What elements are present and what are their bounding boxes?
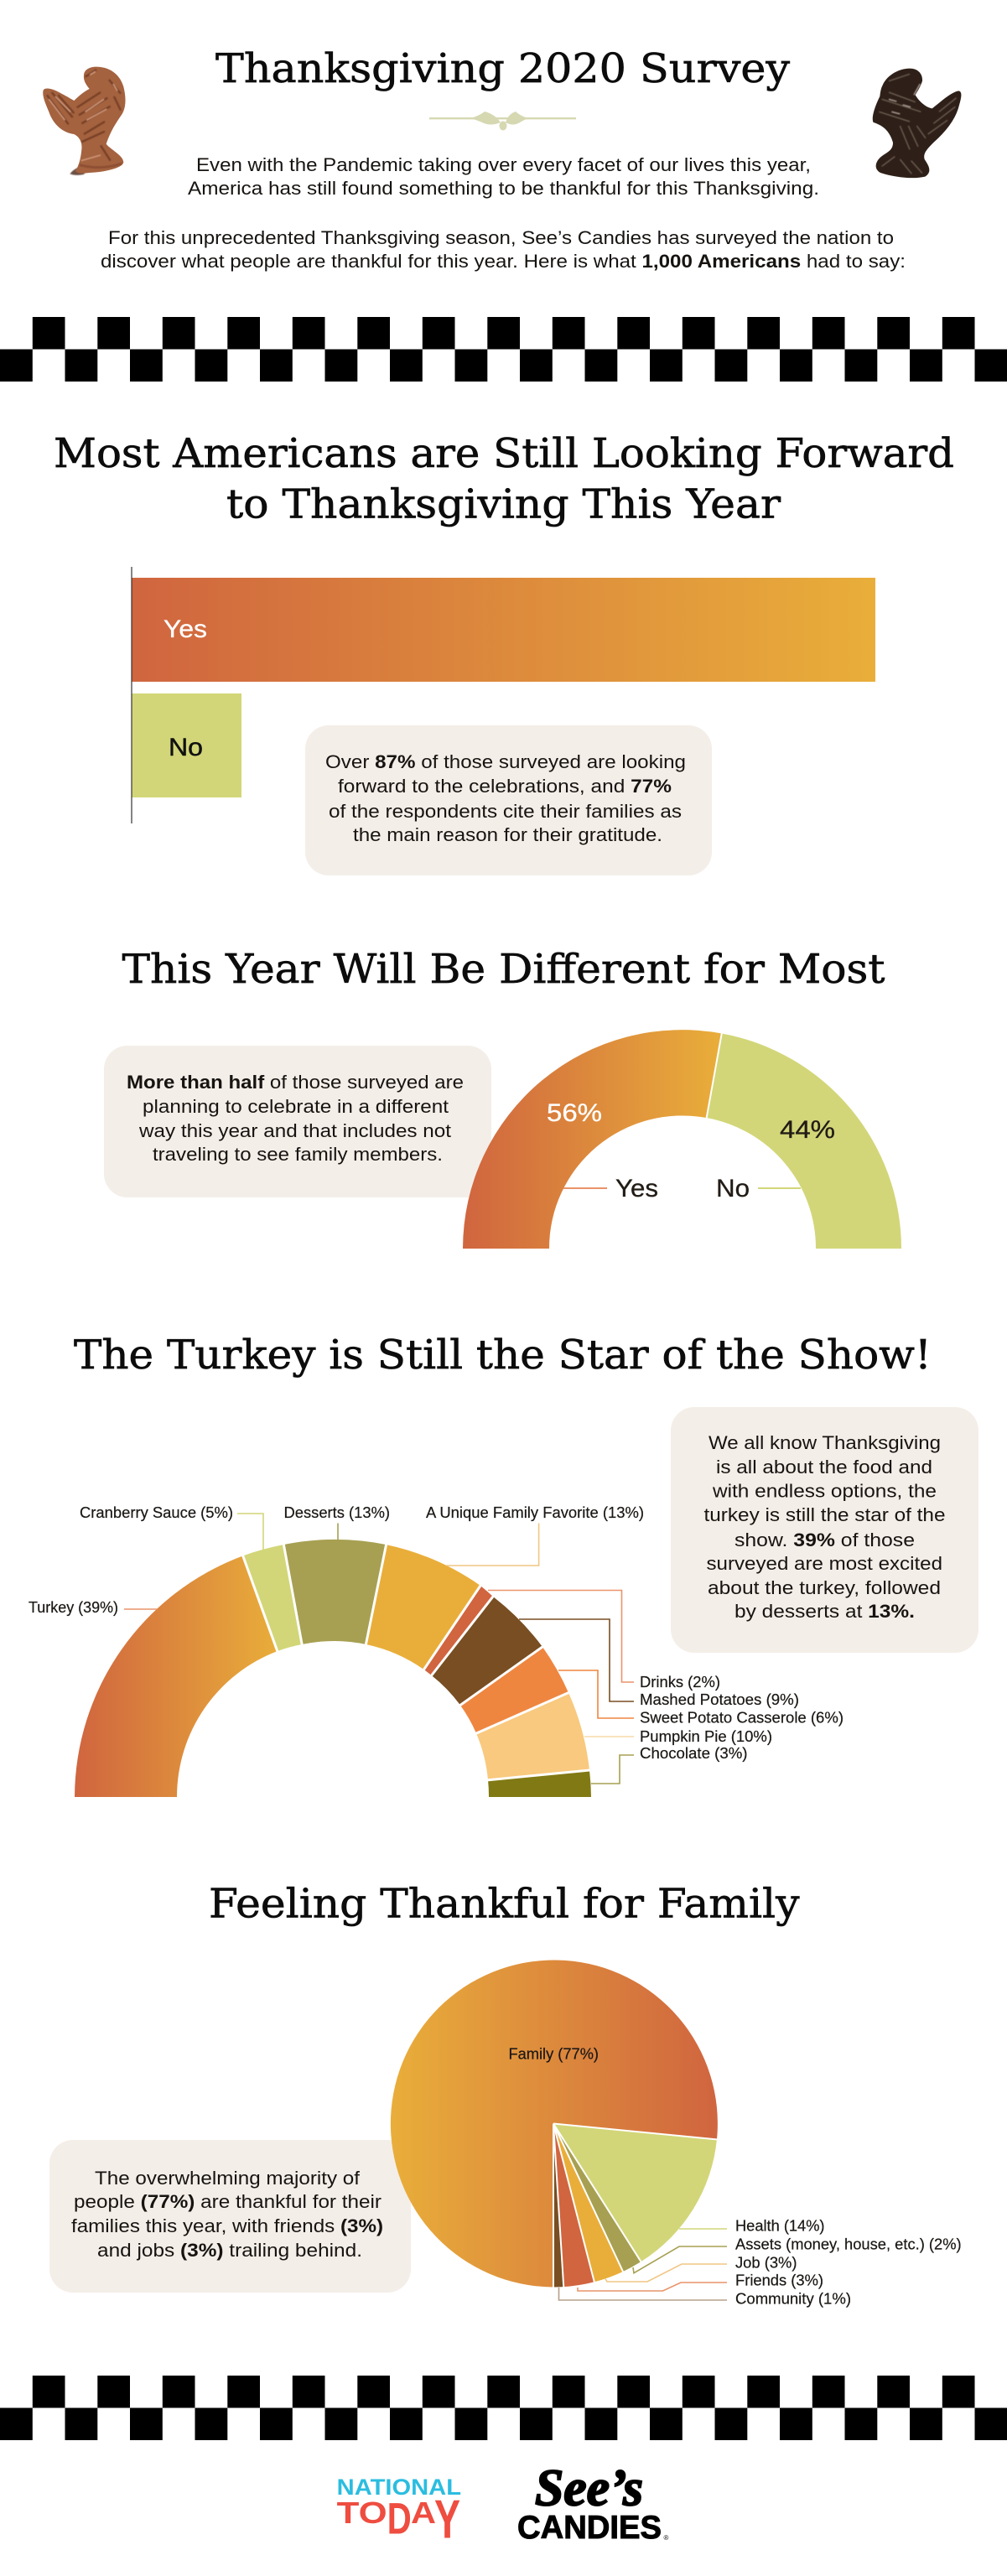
callout: more than half (104, 1046, 491, 1197)
callout: 87 percent: of the respondents cite their families as (329, 801, 682, 822)
icon: milk chocolate turkey (43, 67, 126, 175)
callout: food: show. 39% of those (734, 1530, 915, 1550)
header section (43, 45, 961, 272)
chart labels: Pumpkin Pie (10%) (640, 1728, 772, 1745)
section: different this year (104, 946, 901, 1249)
gauge chart: 56% (547, 1099, 602, 1127)
gauge chart: No (716, 1175, 750, 1202)
chart labels: Sweet Potato Casserole (6%) (640, 1709, 843, 1726)
chart labels: Assets (money, house, etc.) (2%) (735, 2236, 962, 2252)
leader lines (558, 2229, 727, 2300)
chart labels: Drinks (2%) (640, 1674, 720, 1690)
logo: National Today: TO (337, 2496, 387, 2530)
gauge chart: 44% (780, 1116, 835, 1144)
heading (54, 430, 954, 528)
heading: The Turkey is Still the Star of the Show! (74, 1332, 932, 1379)
gauge chart (463, 1030, 901, 1249)
pie chart: thankful for: Family (77%) (508, 2046, 599, 2063)
gauge chart: Yes (615, 1175, 658, 1202)
chart labels (29, 1504, 843, 1762)
heading: This Year Will Be Different for Most (122, 946, 885, 993)
section: looking forward (54, 430, 954, 875)
pie chart: thankful for (391, 1961, 962, 2308)
callout: 87 percent: Over 87% of those surveyed are looking (325, 751, 686, 772)
callout: more than half: traveling to see family members. (153, 1144, 443, 1165)
logo: See's Candies: CANDIES (517, 2510, 662, 2546)
callout: food: turkey is still the star of the (704, 1504, 946, 1525)
chart labels: Mashed Potatoes (9%) (640, 1691, 799, 1708)
callout: food: about the turkey, followed (708, 1577, 941, 1598)
bar chart: Yes (164, 615, 207, 643)
callout: overwhelming majority (49, 2140, 411, 2293)
callout: more than half: More than half of those surveyed are (127, 1072, 464, 1093)
logo: See's Candies (517, 2460, 669, 2546)
callout: overwhelming majority: families this year, with friends (3%) (71, 2215, 383, 2236)
callout: food (671, 1407, 978, 1653)
callout: more than half: way this year and that includes not (138, 1120, 452, 1141)
chart labels (735, 2218, 962, 2308)
heading: Most Americans are Still Looking Forward (54, 430, 954, 477)
callout: 87 percent: forward to the celebrations, and 77% (338, 776, 672, 797)
chart labels: Chocolate (3%) (640, 1745, 748, 1762)
chart labels: Health (14%) (735, 2218, 825, 2235)
callout: overwhelming majority: and jobs (3%) trailing behind. (97, 2240, 362, 2261)
intro text: discover what people are thankful for this year. Here is what 1,000 Americans had to say: (101, 251, 906, 272)
bar chart: No (169, 734, 203, 761)
logo: National Today: D (387, 2494, 412, 2544)
intro text (101, 154, 906, 272)
checkered band top (0, 317, 1007, 382)
icon: dark chocolate turkey (873, 69, 961, 178)
callout: food: We all know Thanksgiving (709, 1432, 941, 1453)
title: Thanksgiving 2020 Survey (215, 45, 790, 92)
section: turkey star (29, 1332, 978, 1797)
logo: National Today: Y (434, 2489, 460, 2550)
callout: 87 percent (305, 725, 712, 875)
heading: Feeling Thankful for Family (209, 1880, 800, 1927)
callout: overwhelming majority: people (77%) are thankful for their (74, 2191, 382, 2212)
intro text: America has still found something to be thankful for this Thanksgiving. (188, 178, 819, 199)
chart labels: A Unique Family Favorite (13%) (426, 1504, 644, 1521)
heading: to Thanksgiving This Year (226, 481, 781, 528)
logo: See's Candies: See’s (535, 2460, 643, 2517)
donut chart: favorite foods (29, 1504, 843, 1797)
chart labels: Community (1%) (735, 2291, 851, 2308)
logo: See's Candies: ® (664, 2534, 669, 2542)
ornament divider (429, 112, 576, 131)
callout: food: by desserts at 13%. (734, 1601, 915, 1622)
logo: National Today: A (411, 2496, 436, 2530)
leader lines (124, 1514, 634, 1784)
bar chart (131, 567, 875, 823)
intro text: For this unprecedented Thanksgiving season, See’s Candies has surveyed the nation to (108, 227, 894, 248)
checkered band bottom (0, 2376, 1007, 2440)
intro text: Even with the Pandemic taking over every facet of our lives this year, (196, 154, 811, 175)
callout: 87 percent: the main reason for their gratitude. (353, 824, 662, 845)
callout: food: with endless options, the (712, 1481, 937, 1501)
chart labels: Cranberry Sauce (5%) (80, 1504, 233, 1521)
callout: overwhelming majority: The overwhelming majority of (95, 2168, 361, 2189)
logo: National Today: NATIONAL (337, 2475, 461, 2500)
callout: more than half: planning to celebrate in a different (143, 1096, 449, 1117)
chart labels: Desserts (13%) (283, 1504, 390, 1521)
chart labels: Job (3%) (735, 2254, 797, 2271)
callout: food: surveyed are most excited (706, 1553, 942, 1574)
section: thankful for family (49, 1880, 962, 2308)
chart labels: Friends (3%) (735, 2272, 823, 2289)
chart labels: Turkey (39%) (29, 1599, 118, 1616)
logo: National Today (337, 2475, 461, 2550)
callout: food: is all about the food and (716, 1457, 932, 1478)
